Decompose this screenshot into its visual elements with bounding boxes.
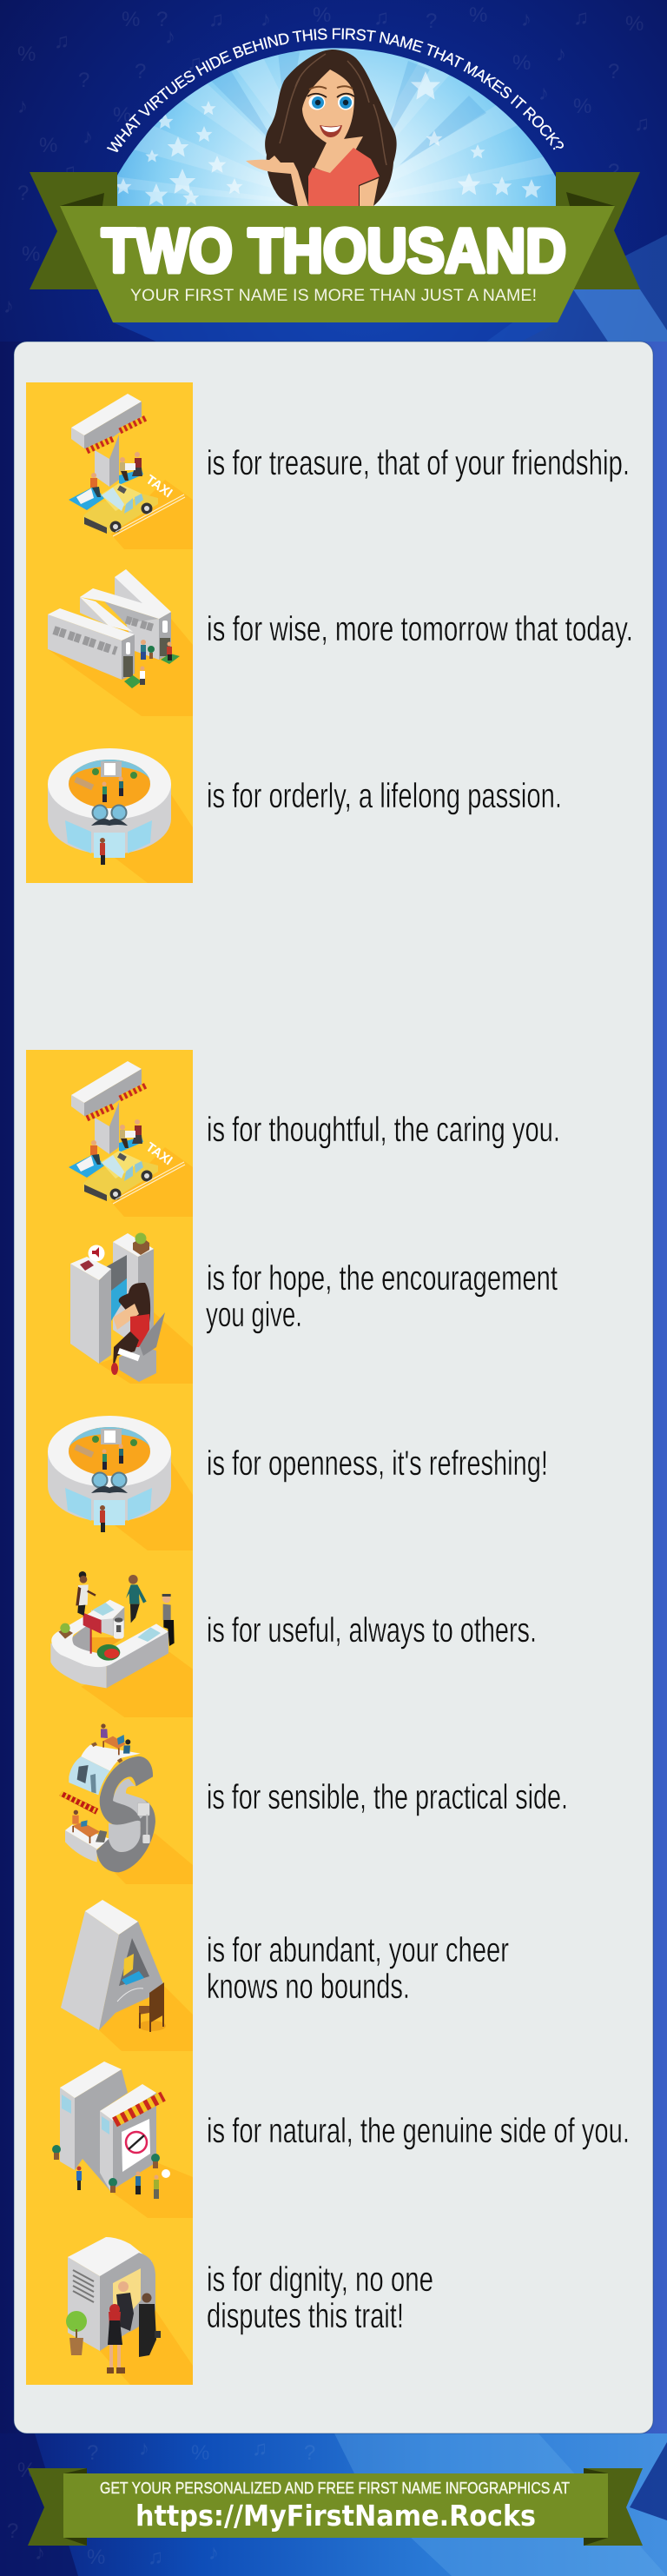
background doodle pattern: ♫ (148, 2546, 163, 2569)
background doodle pattern: ♪ (538, 82, 549, 105)
background doodle pattern: ? (7, 2520, 18, 2543)
background doodle pattern: ? (426, 10, 437, 33)
panel: W wise (26, 549, 193, 716)
background doodle pattern: % (87, 2546, 105, 2569)
footer call to action: GET YOUR PERSONALIZED AND FREE FIRST NAME INFOGRAPHICS AT (100, 2480, 570, 2497)
background doodle pattern: ? (135, 60, 146, 83)
panel: H hope (26, 1217, 193, 1384)
neck and chest (314, 136, 363, 174)
mouth (320, 125, 342, 137)
text: hope (206, 1259, 558, 1334)
text: abundant: is for abundant, your cheer (207, 1931, 509, 1969)
background doodle pattern: ♫ (208, 8, 224, 31)
panel: T treasure (26, 382, 193, 549)
background doodle pattern: ? (608, 160, 619, 183)
text: abundant: knows no bounds. (207, 1968, 410, 2006)
background doodle pattern: ♪ (556, 43, 566, 66)
eyes (309, 96, 325, 110)
ribbon front (60, 206, 615, 322)
ribbon folds (60, 193, 104, 206)
background doodle pattern: % (22, 242, 40, 266)
panel: A abundant (26, 1884, 193, 2051)
background doodle pattern: ♫ (61, 160, 76, 183)
background doodle pattern: % (122, 8, 140, 31)
ribbon left tail (30, 172, 117, 289)
background doodle pattern: ♪ (521, 8, 532, 31)
background doodle pattern: ♫ (187, 51, 202, 75)
panel: U useful (26, 1550, 193, 1717)
hair (265, 50, 397, 206)
arm and hand (246, 156, 308, 206)
panel: T treasure: TAXI (143, 472, 175, 501)
background doodle pattern: ♪ (208, 2541, 219, 2565)
background doodle pattern: ♪ (165, 25, 175, 49)
ribbon right tail (556, 172, 640, 289)
footer ribbon folds (64, 2468, 87, 2473)
text: useful: is for useful, always to others. (207, 1611, 537, 1650)
background doodle pattern: ♫ (573, 6, 589, 30)
background doodle pattern: % (17, 2459, 36, 2482)
shirt (308, 148, 380, 206)
background doodle pattern: % (113, 103, 131, 127)
background doodle pattern: ? (156, 8, 168, 31)
footer ribbon front (63, 2473, 608, 2538)
panel: S sensible (26, 1717, 193, 1884)
ribbon: header (30, 172, 640, 322)
background doodle pattern: % (512, 51, 531, 75)
panel: O orderly (26, 716, 193, 883)
panel: T thoughtful: TAXI (143, 1139, 175, 1168)
panel: O openness (26, 1384, 193, 1550)
background doodle pattern: % (625, 12, 644, 36)
background doodle pattern: ♪ (83, 125, 93, 149)
background doodle pattern: % (573, 95, 591, 118)
background doodle pattern: ♪ (35, 2541, 45, 2565)
panel: T thoughtful (26, 1050, 193, 1217)
background doodle pattern: ? (17, 182, 29, 205)
footer url: https://MyFirstName.Rocks (135, 2499, 536, 2533)
background doodle pattern: ? (608, 60, 619, 83)
title: TWO THOUSAND (102, 217, 566, 286)
arc heading text: WHAT VIRTUES HIDE BEHIND THIS FIRST NAME THAT MAKES IT ROCK? (106, 28, 564, 153)
background doodle pattern: ♪ (17, 95, 28, 118)
background doodle pattern: ? (87, 2441, 98, 2465)
background doodle pattern: % (191, 2441, 209, 2465)
footer ribbon tails (28, 2468, 87, 2546)
background doodle pattern: ♫ (634, 112, 650, 136)
background doodle pattern: ♪ (261, 8, 271, 31)
text: dignity: disputes this trait! (207, 2297, 404, 2335)
background doodle pattern: % (313, 3, 331, 27)
background doodle pattern: ♫ (373, 6, 389, 30)
text: abundant (207, 1931, 509, 2006)
background doodle pattern: ? (304, 2441, 315, 2465)
text: hope: you give. (206, 1296, 302, 1334)
background doodle pattern: ? (78, 69, 89, 92)
face (302, 70, 354, 144)
background doodle pattern: ♪ (3, 295, 14, 318)
subtitle: YOUR FIRST NAME IS MORE THAN JUST A NAME! (130, 286, 537, 305)
background doodle pattern: % (469, 3, 487, 27)
ribbon: footer (28, 2468, 643, 2546)
background doodle pattern: ♫ (252, 2437, 267, 2460)
character: woman (246, 50, 397, 206)
panel: D dignity (26, 2218, 193, 2385)
sunburst dome (117, 48, 556, 206)
panel: N natural (26, 2051, 193, 2218)
background doodle pattern: % (39, 134, 57, 157)
text: dignity: is for dignity, no one (207, 2261, 433, 2299)
background doodle pattern: ♪ (139, 2437, 149, 2460)
background doodle pattern: % (17, 43, 36, 66)
main card (14, 342, 653, 2433)
background doodle pattern: ♫ (54, 30, 69, 53)
text: openness: is for openness, it's refreshing! (207, 1444, 548, 1483)
text: dignity (207, 2261, 433, 2335)
